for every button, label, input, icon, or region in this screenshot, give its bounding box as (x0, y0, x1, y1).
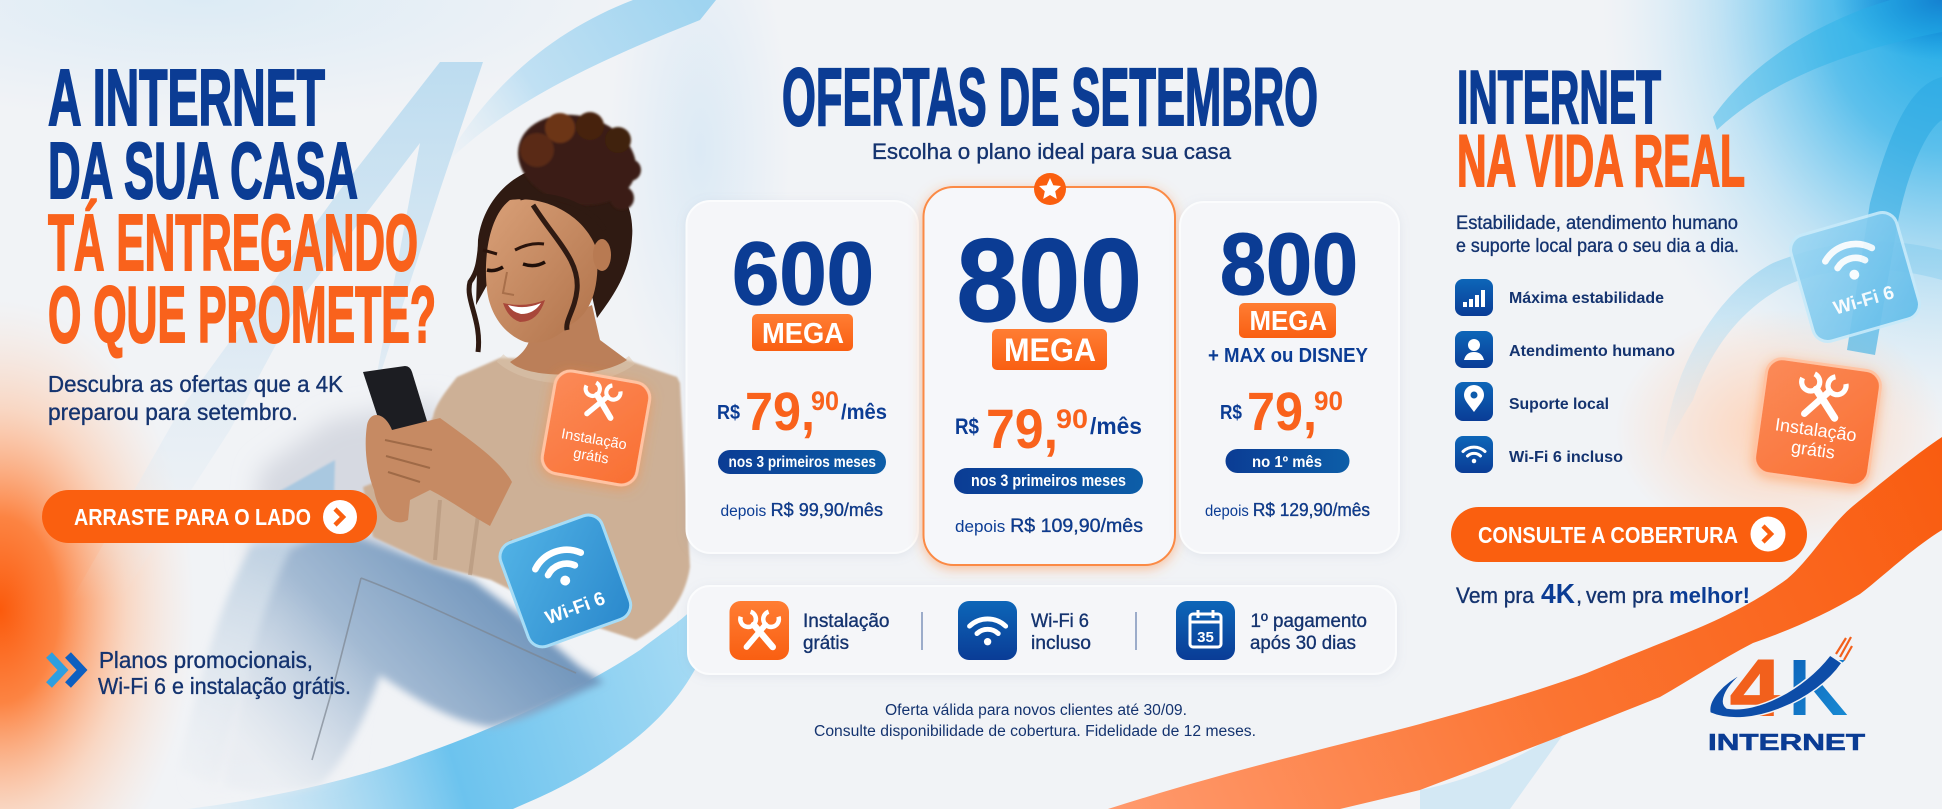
panel: plano 600 mega: 600 (732, 223, 874, 323)
jeans seam (312, 578, 576, 760)
period pill: no 1º mês (1252, 454, 1322, 471)
cube: instalação grátis (photo) (540, 368, 652, 488)
feature list (1455, 279, 1675, 473)
feature: suporte local: Suporte local (1509, 396, 1609, 413)
hair curls (469, 196, 605, 352)
panel: plano 600 mega (686, 201, 918, 553)
price: R$ (1220, 402, 1242, 424)
period pill: nos 3 primeiros meses (728, 454, 876, 471)
cube: instalação grátis (right) (1752, 357, 1883, 488)
panel: plano 800 mega max ou disney: 800 (1220, 216, 1358, 313)
period pill (954, 468, 1143, 494)
panel: plano 800 mega destaque: 800 (956, 215, 1142, 347)
hair bun (508, 102, 646, 218)
feature: atendimento humano (1455, 331, 1675, 368)
icon: calendar: 35 (1197, 629, 1214, 646)
left description (48, 371, 344, 425)
logo: 4K internet (1708, 637, 1865, 755)
panel: plano 800 mega max ou disney (1180, 202, 1399, 553)
price: 79, (986, 397, 1058, 460)
rear leg jeans (178, 542, 300, 785)
slogan: 4K (1541, 578, 1575, 609)
price: /mês (841, 401, 887, 424)
logo: 4K internet: INTERNET (1708, 729, 1865, 755)
benefit: primeiro pagamento: após 30 dias (1250, 633, 1356, 654)
price: R$ (717, 402, 740, 424)
left footnote text: Planos promocionais, (99, 647, 313, 673)
cube: instalação grátis (right): Instalação (1774, 414, 1858, 446)
left description: preparou para setembro. (48, 399, 298, 425)
icon: wifi (958, 601, 1017, 660)
smile (503, 300, 545, 322)
front leg jeans (225, 536, 604, 792)
price: /mês (1090, 413, 1142, 439)
center subtitle: Escolha o plano ideal para sua casa (872, 139, 1232, 164)
cube: instalação grátis (photo): Instalação (560, 426, 628, 453)
left footnote text: Wi-Fi 6 e instalação grátis. (98, 673, 351, 699)
slogan (1456, 578, 1750, 609)
icon: double chevron (49, 655, 82, 685)
benefit: instalação grátis (803, 611, 890, 654)
slogan: , (1576, 583, 1582, 608)
benefit: instalação grátis: grátis (803, 633, 849, 654)
benefit: wi-fi 6 incluso (1031, 611, 1091, 654)
icon: star badge (1034, 173, 1066, 205)
button: consulte a cobertura (1451, 507, 1807, 562)
ear (593, 239, 611, 271)
price: 90 (1314, 386, 1343, 416)
right description: e suporte local para o seu dia a dia. (1456, 236, 1739, 257)
cube: instalação grátis (right): grátis (1790, 437, 1836, 463)
phone (363, 366, 434, 460)
cube: wi-fi 6 (photo): Wi-Fi 6 (543, 588, 608, 629)
icon: calendar (1176, 601, 1235, 660)
blue pillow (265, 460, 335, 520)
feature: suporte local (1455, 382, 1609, 421)
orange ribbon (1108, 437, 1942, 809)
price: R$ (955, 414, 979, 439)
hands (366, 415, 512, 526)
button: arraste para o lado (42, 490, 377, 543)
after price: depois R$ 129,90/mês (1205, 500, 1370, 520)
sweater shading (435, 358, 632, 610)
right description: Estabilidade, atendimento humano (1456, 213, 1738, 234)
period pill (718, 450, 886, 474)
after price: depois R$ 99,90/mês (720, 500, 883, 520)
left heading: DA SUA CASA (48, 126, 358, 215)
benefit: wi-fi 6 incluso: incluso (1031, 633, 1091, 654)
left heading: A INTERNET (48, 53, 325, 142)
cube: wi-fi 6 (photo) (496, 511, 635, 651)
cube: instalação grátis (photo): grátis (572, 446, 610, 468)
feature: máxima estabilidade (1455, 279, 1664, 316)
slogan: melhor! (1669, 583, 1750, 608)
neck (510, 305, 627, 375)
feature: wi-fi 6 incluso (1455, 436, 1623, 473)
left heading (48, 53, 436, 359)
left footnote text (98, 647, 351, 699)
logo: 4K internet: K (1788, 643, 1848, 732)
price: 79, (1247, 382, 1317, 442)
hair back (476, 165, 632, 318)
brows and eyes (483, 244, 544, 254)
benefit: wi-fi 6 incluso: Wi-Fi 6 (1031, 611, 1089, 632)
sofa (200, 400, 440, 780)
sweater (363, 358, 690, 640)
mega badge: MEGA (1250, 305, 1327, 336)
right heading (1457, 55, 1745, 202)
benefit: primeiro pagamento: 1º pagamento (1250, 611, 1367, 632)
cube: wi-fi 6 (right) (1787, 209, 1923, 345)
mega badge: MEGA (762, 318, 844, 350)
face (486, 199, 598, 343)
benefit: instalação grátis: Instalação (803, 611, 890, 632)
left description: Descubra as ofertas que a 4K (48, 371, 344, 397)
price: 90 (1056, 404, 1088, 434)
button: arraste para o lado: ARRASTE PARA O LADO (74, 504, 311, 530)
feature: wi-fi 6 incluso: Wi-Fi 6 incluso (1509, 449, 1623, 466)
slogan: vem pra (1586, 583, 1664, 608)
fine print (814, 702, 1256, 740)
feature: máxima estabilidade: Máxima estabilidade (1509, 290, 1664, 307)
photo: woman with phone on sofa (178, 102, 690, 793)
center title: OFERTAS DE SETEMBRO (782, 52, 1318, 143)
fine print: Consulte disponibilidade de cobertura. Fidelidade de 12 meses. (814, 723, 1256, 740)
left heading: O QUE PROMETE? (48, 270, 436, 359)
button: consulte a cobertura: CONSULTE A COBERTURA (1478, 522, 1738, 548)
right description (1456, 213, 1739, 257)
panel: plano 800 mega destaque (924, 187, 1175, 565)
benefit: primeiro pagamento (1250, 611, 1367, 654)
price (955, 397, 1142, 460)
slogan: Vem pra (1456, 583, 1535, 608)
streaming add-on: + MAX ou DISNEY (1208, 345, 1369, 367)
fine print: Oferta válida para novos clientes até 30/09. (885, 702, 1187, 719)
left heading: TÁ ENTREGANDO (48, 198, 418, 287)
mega badge: MEGA (1004, 332, 1096, 368)
period pill: nos 3 primeiros meses (971, 472, 1126, 490)
price: 79, (745, 382, 815, 442)
panel: benefits bar (688, 586, 1396, 674)
period pill (1226, 449, 1350, 473)
feature: atendimento humano: Atendimento humano (1509, 343, 1675, 360)
after price: depois R$ 109,90/mês (955, 515, 1143, 537)
price (1220, 382, 1343, 442)
logo: 4K internet: 4 (1730, 643, 1783, 732)
price (717, 382, 887, 442)
right heading: INTERNET (1457, 55, 1661, 139)
price: 90 (811, 386, 839, 416)
icon: tools (730, 601, 789, 660)
cube: wi-fi 6 (right): Wi-Fi 6 (1831, 282, 1897, 320)
